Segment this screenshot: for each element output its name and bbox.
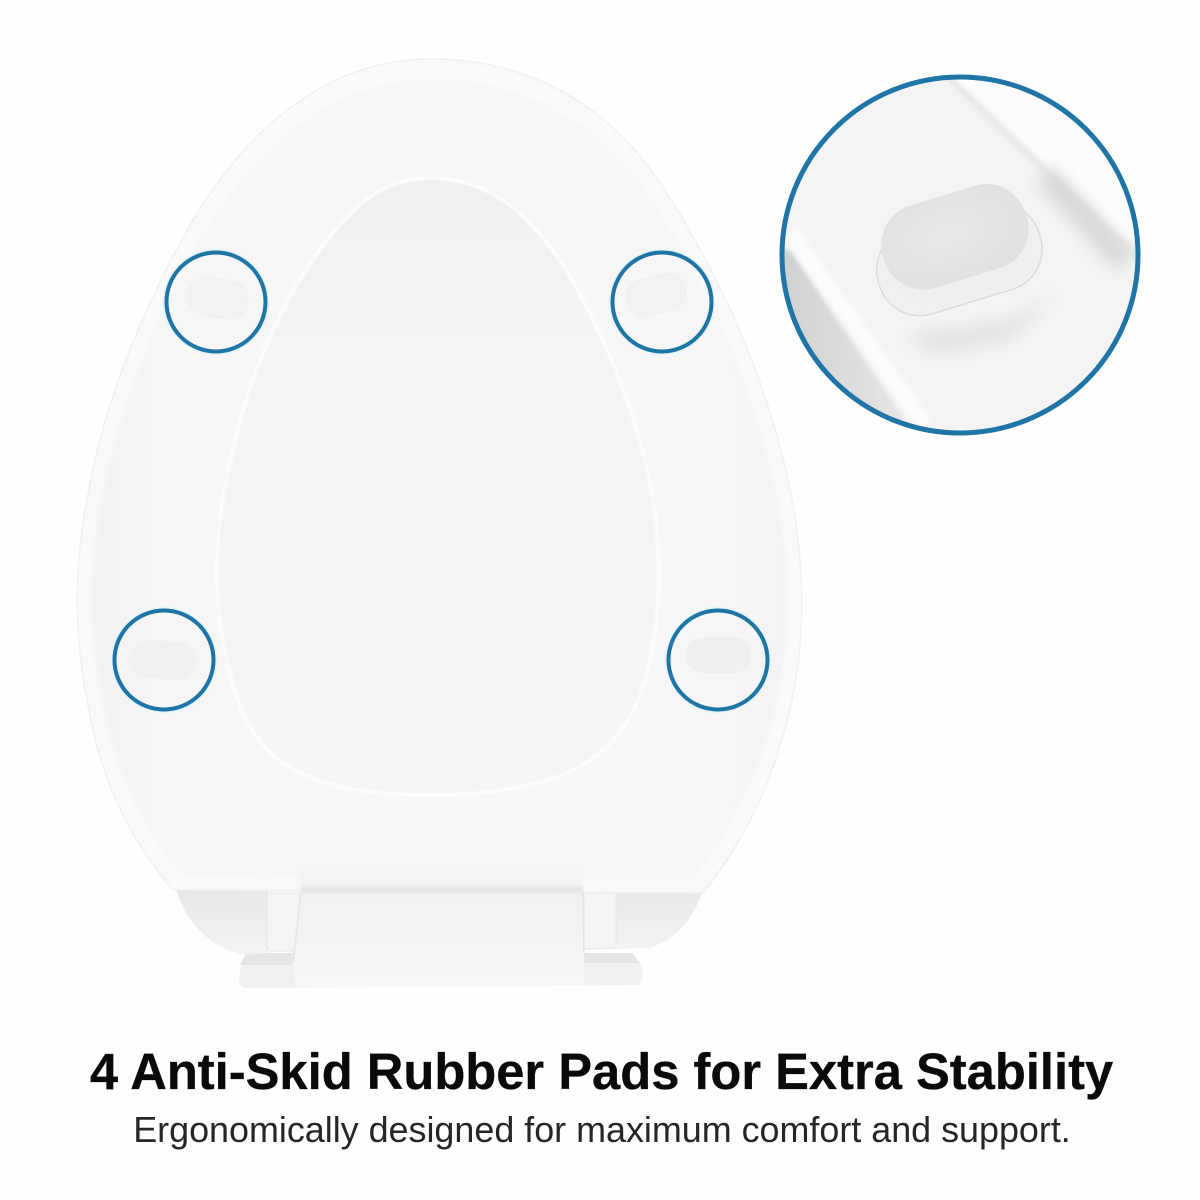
product illustration: [76, 58, 1140, 988]
zoomed detail callout: [780, 74, 1140, 436]
pad marker: bottom right: [666, 608, 770, 712]
seat rim step: [92, 80, 787, 880]
seat notch tabs above hinge: [301, 870, 583, 893]
subtitle: Ergonomically designed for maximum comfort and support.: [133, 1110, 1071, 1150]
seat outer shell: [77, 59, 802, 893]
pad marker: bottom left: [112, 608, 216, 712]
title: 4 Anti-Skid Rubber Pads for Extra Stability: [90, 1043, 1113, 1100]
rear hinge lobes: [176, 890, 703, 955]
detail: rubber pad: [876, 184, 1043, 316]
pad marker: top right: [610, 250, 714, 354]
seat inner recess: [217, 178, 659, 795]
hinge base plate: [239, 953, 643, 988]
detail: seat ridge shadows: [780, 74, 1140, 436]
hinge bar: [293, 886, 585, 988]
pad marker: top left: [164, 250, 268, 354]
